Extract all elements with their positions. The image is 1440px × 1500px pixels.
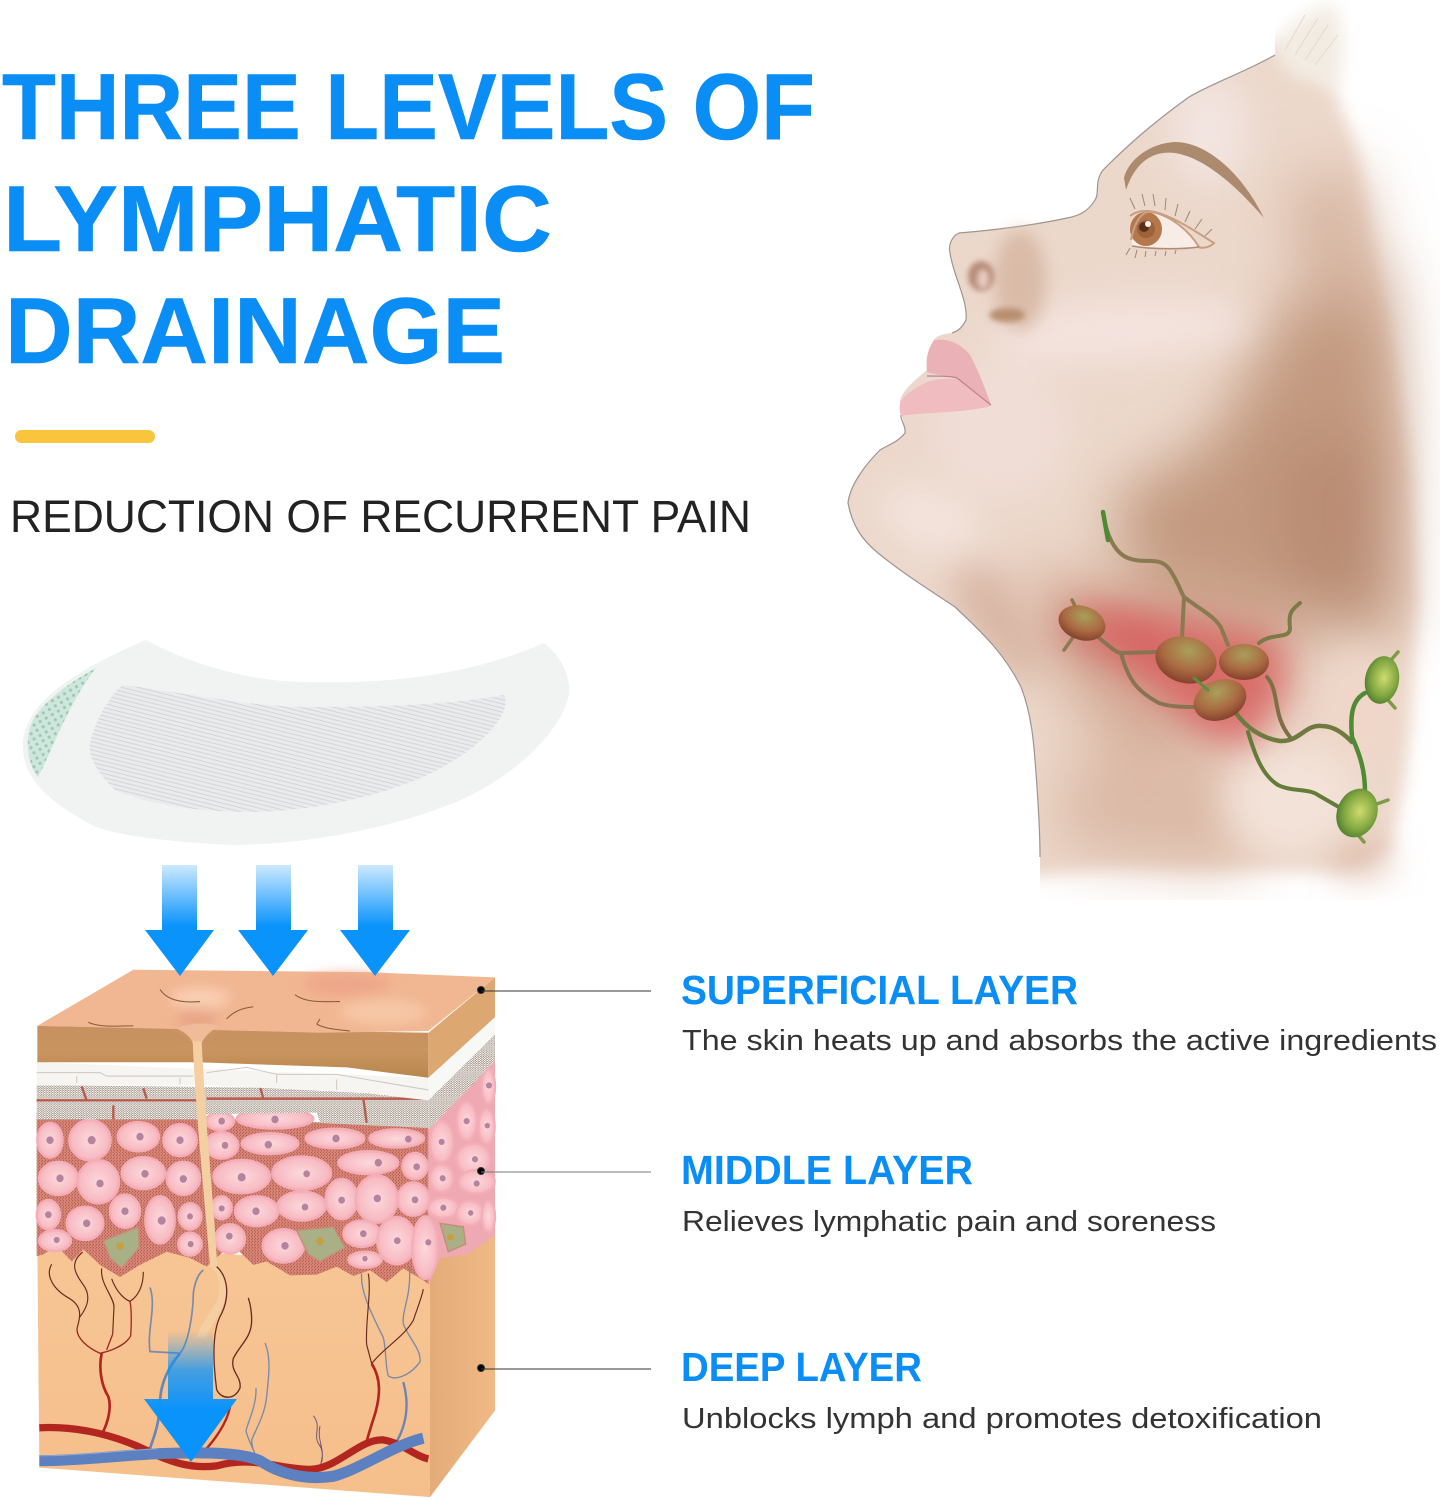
text: deep layer	[681, 1344, 1322, 1435]
layer pointers	[478, 986, 651, 1372]
skin dimple over pore	[177, 1024, 220, 1043]
skin cells	[37, 1069, 495, 1279]
text: middle layer: MIDDLE LAYER	[681, 1147, 973, 1193]
hair wisps	[1275, 5, 1342, 90]
eye	[1126, 194, 1214, 258]
text: superficial layer: The skin heats up and absorbs the active ingredients	[682, 1025, 1437, 1057]
subtitle: REDUCTION OF RECURRENT PAIN	[10, 491, 751, 542]
patch product	[23, 640, 569, 845]
face and neck illustration	[800, 5, 1418, 880]
cell nuclei	[45, 1082, 492, 1261]
deep arrow	[144, 1331, 237, 1462]
capillaries and vessels	[39, 1252, 428, 1478]
title	[2, 54, 815, 383]
top skin surface	[37, 970, 495, 1033]
lips	[900, 340, 991, 416]
text: superficial layer	[681, 967, 1437, 1057]
title: THREE LEVELS OF	[2, 54, 815, 159]
skin shading	[800, 5, 1418, 880]
patch green tab	[28, 668, 96, 777]
front dermis	[37, 1244, 430, 1497]
patch mesh pad	[90, 685, 505, 812]
right strip	[428, 1033, 495, 1130]
text: deep layer: Unblocks lymph and promotes detoxification	[682, 1403, 1322, 1435]
hair shaft	[193, 1041, 227, 1338]
right brown side	[428, 977, 495, 1078]
lymph vessels and nodes	[1054, 512, 1403, 844]
nose	[968, 230, 1046, 330]
text: middle layer: Relieves lymphatic pain and soreness	[682, 1206, 1216, 1238]
epidermis speckled matrix	[37, 1112, 428, 1284]
right side cell face	[428, 1060, 495, 1286]
speckled fat strip front	[37, 1085, 428, 1128]
skin cross-section block	[37, 970, 495, 1497]
right side dermis	[428, 1234, 495, 1497]
top brown band	[37, 1026, 428, 1078]
title: DRAINAGE	[5, 278, 505, 383]
red inflammation glow	[1065, 610, 1285, 745]
speckled strip red gaps	[37, 1086, 428, 1123]
three arrows	[145, 865, 410, 976]
title: LYMPHATIC	[3, 166, 552, 271]
text: superficial layer: SUPERFICIAL LAYER	[681, 967, 1078, 1013]
surface wrinkles	[88, 989, 350, 1031]
white layer	[37, 1062, 428, 1100]
text: middle layer	[681, 1147, 1216, 1238]
text: deep layer: DEEP LAYER	[681, 1344, 922, 1390]
pigment cells	[103, 1223, 466, 1268]
face outline	[848, 55, 1275, 857]
yellow accent bar	[15, 430, 155, 443]
eyebrow	[1124, 142, 1264, 218]
